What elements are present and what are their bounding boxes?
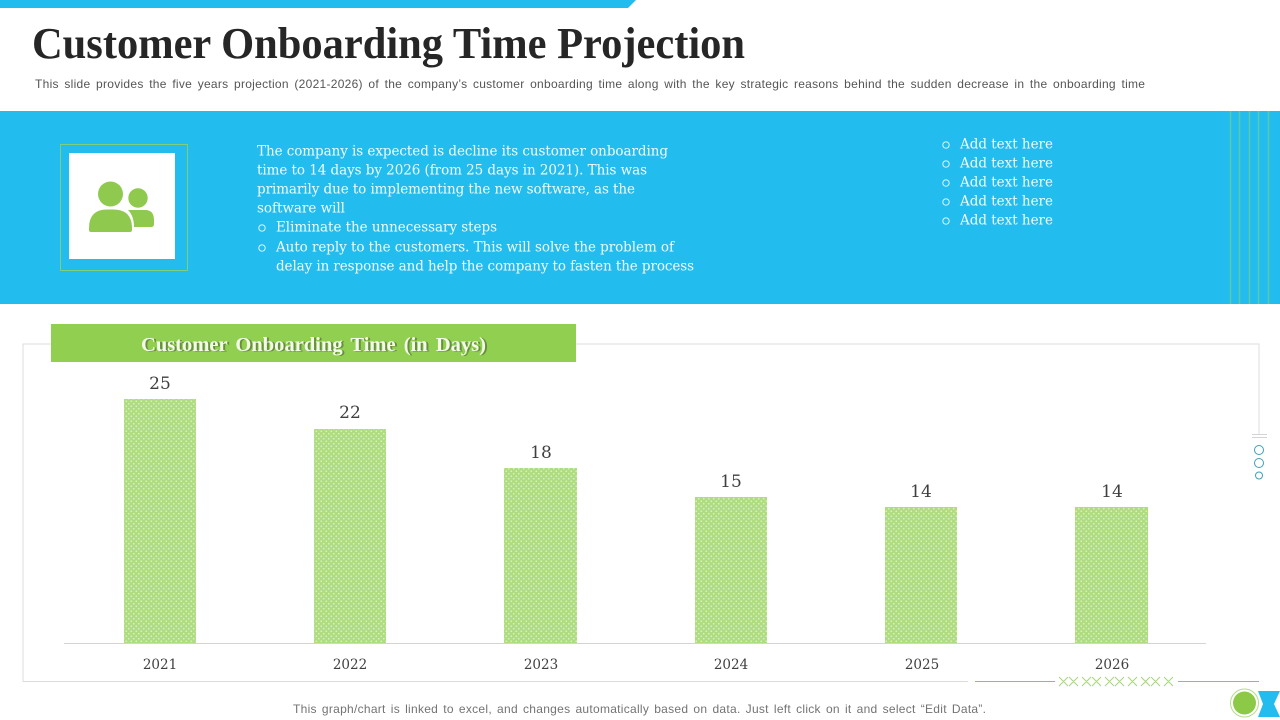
text block: add text list: Add text here [959, 136, 1053, 152]
text block: add text list [943, 136, 1053, 228]
text block: description: delay in response and help the company to fasten the process [276, 258, 694, 274]
bar 2021 [124, 374, 196, 673]
bar 2022 [314, 403, 386, 673]
text block: add text list: Add text here [959, 212, 1053, 228]
bar chart [64, 374, 1206, 673]
bar 2026: 2026 [1095, 657, 1129, 673]
icon: customers [60, 144, 188, 270]
bar 2026 [1075, 482, 1148, 673]
chart frame [23, 344, 1259, 682]
page badge [1230, 689, 1280, 717]
panel: blue banner [0, 111, 1280, 304]
chart heading [51, 324, 576, 362]
decorative cross band [975, 677, 1259, 686]
bar 2025 [885, 482, 957, 673]
bar 2026: 14 [1101, 482, 1123, 502]
text block: add text list: Add text here [959, 194, 1053, 210]
bar 2024: 15 [720, 472, 742, 492]
text block: description: software will [257, 200, 345, 216]
bar 2021: 25 [149, 374, 171, 394]
title: Customer Onboarding Time Projection [32, 19, 745, 68]
text block: add text list: Add text here [959, 156, 1053, 172]
bar 2022: 2022 [333, 657, 367, 673]
bar 2024: 2024 [714, 657, 748, 673]
text block: description: The company is expected is decline its customer onboarding [257, 144, 668, 160]
footnote: This graph/chart is linked to excel, and changes automatically based on data. Just left click on it and select “Edit Data”. [293, 702, 986, 716]
bar 2023: 2023 [524, 657, 558, 673]
text block: description: time to 14 days by 2026 (from 25 days in 2021). This was [257, 162, 647, 178]
bar 2025: 14 [910, 482, 932, 502]
bar 2021: 2021 [143, 657, 177, 673]
text block: description: Eliminate the unnecessary steps [276, 220, 497, 236]
bar 2023: 18 [530, 443, 552, 463]
chart heading: Customer Onboarding Time (in Days) [143, 334, 488, 356]
vertical accent lines [1230, 111, 1268, 304]
text block: description: Auto reply to the customers. This will solve the problem of [275, 240, 675, 256]
axis line [64, 642, 1206, 644]
bar 2023 [504, 443, 577, 673]
text block: description: primarily due to implementing the new software, as the [257, 182, 635, 198]
chart heading: Customer Onboarding Time (in Days) [141, 334, 486, 356]
bar 2025: 2025 [905, 657, 939, 673]
text block: description [257, 144, 694, 274]
top accent bar [0, 0, 636, 8]
text block: add text list: Add text here [959, 174, 1053, 190]
bar 2022: 22 [339, 403, 361, 423]
decorative side circles [1252, 434, 1267, 479]
subtitle: This slide provides the five years projection (2021-2026) of the company’s customer onboarding time along with the key strategic reasons behind the sudden decrease in the onboarding time [35, 77, 1145, 91]
bar 2024 [695, 472, 767, 673]
